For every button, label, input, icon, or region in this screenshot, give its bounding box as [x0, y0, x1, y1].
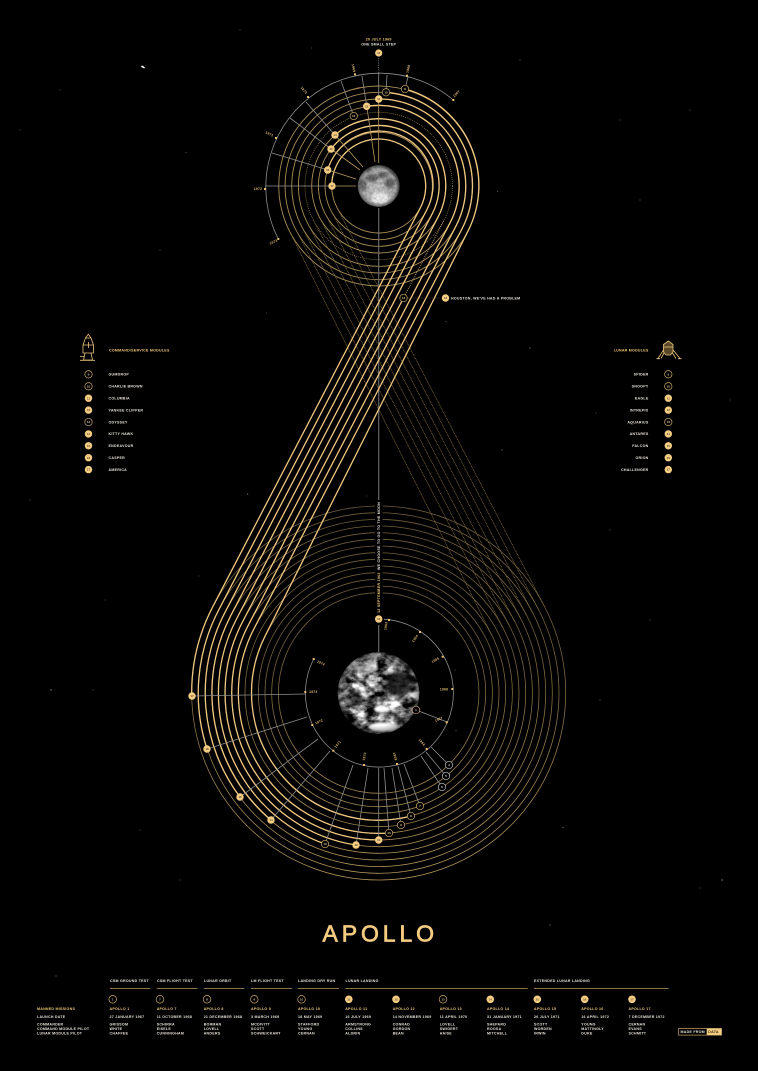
mission column: apollo 16: 16: [583, 997, 587, 1001]
mission column: apollo 14: 14: [489, 997, 492, 1001]
legend: lunar modules: ANTARES: [630, 432, 649, 436]
mission column: apollo 8: 21 DECEMBER 1968: [204, 1015, 242, 1019]
mission column: apollo 12: GORDON: [393, 1027, 411, 1031]
mission column: apollo 1: GRISSOM: [110, 1022, 128, 1026]
legend: lunar modules: FALCON: [632, 444, 649, 448]
mission column: apollo 15: 15: [536, 997, 539, 1001]
mission column: apollo 9: [250, 996, 281, 1036]
outbound bold trajectories earth to moon: [192, 89, 479, 845]
legend: command/service modules: ENDEAVOUR: [108, 444, 134, 448]
mission column: apollo 9: MCDIVITT: [251, 1022, 271, 1026]
legend: lunar modules: SPIDER: [634, 373, 649, 377]
legend: lunar modules: EAGLE: [635, 396, 649, 400]
vertical quote: 12 SEPTEMBER 1962: [377, 572, 381, 613]
earth mission timeline: 1965: [431, 656, 440, 664]
legend: command/service modules: 10: [87, 384, 90, 388]
legend: lunar modules: [614, 341, 682, 473]
earth mission markers: 4: [448, 763, 450, 767]
mission column: apollo 11: COLLINS: [345, 1027, 363, 1031]
moon mission markers: 10: [384, 90, 388, 94]
icon: lunar module: [656, 341, 682, 359]
earth mission markers: 11: [377, 838, 381, 842]
mission column: apollo 12: APOLLO 12: [393, 1007, 415, 1011]
legend: command/service modules: COLUMBIA: [108, 396, 130, 400]
legend: lunar modules: 10: [667, 384, 670, 388]
earth mission markers: 1: [415, 708, 417, 712]
mission column: apollo 13: HAISE: [440, 1032, 452, 1036]
moon mission markers: 11: [377, 51, 381, 55]
legend: lunar modules: 16: [667, 456, 670, 460]
legend: lunar modules: CHALLENGER: [621, 468, 649, 472]
mission column: apollo 17: APOLLO 17: [628, 1007, 651, 1011]
mission column: apollo 12: [392, 996, 431, 1036]
legend: command/service modules: 9: [88, 372, 90, 376]
callout: one small step: ONE SMALL STEP: [361, 42, 397, 46]
moon mission timeline: 1968: [405, 64, 411, 73]
earth mission markers: 5: [445, 774, 447, 778]
moon mission markers: 15: [329, 147, 333, 151]
mission column: apollo 10: APOLLO 10: [298, 1007, 320, 1011]
table row headings: LAUNCH DATE: [37, 1015, 66, 1019]
mission column: apollo 7: SCHIRRA: [157, 1022, 175, 1026]
earth orbit rings: [192, 506, 566, 880]
badge: made from data: MADE FROM: [680, 1030, 705, 1034]
mission column: apollo 16: 16 APRIL 1972: [581, 1015, 609, 1019]
legend: lunar modules: SNOOPY: [632, 385, 649, 389]
mission column: apollo 10: YOUNG: [298, 1027, 312, 1031]
legend: command/service modules: [80, 334, 170, 473]
earth mission markers: 12: [377, 617, 381, 621]
legend: lunar modules: LUNAR MODULES: [614, 348, 649, 352]
earth mission markers: 7: [419, 804, 421, 808]
badge: made from data: DATA: [708, 1030, 719, 1034]
moon: [357, 165, 401, 207]
mission column: apollo 1: WHITE: [110, 1027, 123, 1031]
table row headings: LUNAR MODULE PILOT: [37, 1032, 83, 1036]
earth mission markers: 8: [410, 814, 412, 818]
earth mission timeline: 1968: [418, 738, 426, 747]
mission table categories: CSM GROUND TEST: [110, 979, 149, 983]
earth mission markers: 17: [190, 694, 194, 698]
callout: one small step: [361, 38, 397, 46]
mission column: apollo 8: LOVELL: [204, 1027, 220, 1031]
earth mission timeline: [192, 619, 453, 845]
earth mission markers: 12: [354, 843, 358, 847]
moon mission timeline: 1971: [265, 131, 274, 138]
mission column: apollo 15: WORDEN: [534, 1027, 552, 1031]
moon mission timeline: 1972: [254, 187, 262, 191]
mission column: apollo 14: APOLLO 14: [487, 1007, 509, 1011]
moon mission markers: 17: [330, 184, 334, 188]
mission column: apollo 9: 3 MARCH 1969: [251, 1015, 279, 1019]
earth mission timeline: 1967: [434, 716, 444, 723]
legend: command/service modules: AMERICA: [108, 468, 127, 472]
mission column: apollo 8: APOLLO 8: [204, 1007, 224, 1011]
mission column: apollo 9: SCHWEICKART: [251, 1032, 281, 1036]
mission column: apollo 12: BEAN: [393, 1032, 404, 1036]
moon mission markers: 13: [352, 114, 356, 118]
mission column: apollo 8: ANDERS: [204, 1032, 221, 1036]
badge: made from data: [678, 1028, 722, 1035]
mission column: apollo 9: 9: [253, 997, 255, 1001]
legend: command/service modules: 11: [87, 396, 90, 400]
legend: command/service modules: 14: [87, 432, 90, 436]
mission column: apollo 1: CHAFFEE: [110, 1032, 129, 1036]
legend: command/service modules: CHARLIE BROWN: [108, 385, 143, 389]
callout: houston: 13: [402, 296, 405, 300]
legend: lunar modules: 17: [667, 468, 670, 472]
mission table categories: LANDING DRY RUN: [298, 979, 335, 983]
legend: command/service modules: 15: [87, 444, 90, 448]
return trajectories from moon to earth: [289, 208, 545, 636]
mission column: apollo 13: [439, 996, 467, 1036]
legend: lunar modules: 13: [667, 420, 670, 424]
apollo 13 dotted leg: [404, 220, 444, 298]
table row headings: COMMAND MODULE PILOT: [37, 1027, 90, 1031]
callout: houston: [400, 294, 520, 302]
mission column: apollo 9: SCOTT: [251, 1027, 265, 1031]
mission column: apollo 14: SHEPARD: [487, 1022, 506, 1026]
table row headings: MANNED MISSIONS: [37, 1007, 75, 1011]
mission column: apollo 10: 18 MAY 1969: [298, 1015, 322, 1019]
callout: houston: 13: [444, 296, 447, 300]
legend: command/service modules: YANKEE CLIPPER: [108, 408, 143, 412]
mission table categories: LUNAR ORBIT: [204, 979, 232, 983]
legend: command/service modules: KITTY HAWK: [108, 432, 133, 436]
mission column: apollo 1: [109, 996, 144, 1036]
mission column: apollo 13: SWIGERT: [440, 1027, 459, 1031]
earth mission markers: 14: [269, 818, 273, 822]
earth mission markers: 9: [400, 823, 402, 827]
mission column: apollo 16: YOUNG: [581, 1022, 596, 1026]
mission column: apollo 15: [534, 996, 560, 1036]
legend: command/service modules: 17: [87, 468, 90, 472]
mission column: apollo 17: 17: [630, 997, 634, 1001]
mission table categories: EXTENDED LUNAR LANDING: [534, 979, 590, 983]
callout: one small step: 20 JULY 1969: [366, 38, 392, 42]
earth mission markers: 15: [238, 795, 242, 799]
legend: command/service modules: GUMDROP: [108, 373, 129, 377]
mission column: apollo 10: CERNAN: [298, 1032, 315, 1036]
legend: lunar modules: AQUARIUS: [627, 420, 649, 424]
earth mission markers: 16: [205, 747, 209, 751]
mission column: apollo 13: APOLLO 13: [440, 1007, 462, 1011]
mission column: apollo 15: 26 JULY 1971: [534, 1015, 560, 1019]
mission column: apollo 8: BORMAN: [204, 1022, 222, 1026]
moon mission markers: 8: [404, 87, 406, 91]
mission column: apollo 14: MITCHELL: [487, 1032, 508, 1036]
mission column: apollo 11: 11: [347, 997, 351, 1001]
mission column: apollo 7: 11 OCTOBER 1968: [157, 1015, 192, 1019]
earth mission timeline: 1970: [362, 752, 367, 761]
callout: houston: HOUSTON, WE'VE HAD A PROBLEM: [451, 296, 520, 300]
mission table categories: CSM FLIGHT TEST: [157, 979, 193, 983]
mission column: apollo 1: 1: [112, 997, 114, 1001]
earth mission markers: [188, 615, 453, 849]
moon orbit rings: [279, 86, 479, 286]
earth mission markers: 6: [441, 785, 443, 789]
mission column: apollo 10: 10: [300, 997, 303, 1001]
icon: command service module: [80, 334, 95, 360]
moon mission markers: 14: [333, 133, 337, 137]
earth mission timeline: 1974: [316, 660, 326, 667]
mission column: apollo 15: APOLLO 15: [534, 1007, 556, 1011]
mission column: apollo 13: 13: [441, 997, 445, 1001]
mission column: apollo 7: [156, 996, 192, 1036]
mission column: apollo 8: [203, 996, 242, 1036]
mission column: apollo 11: ALDRIN: [345, 1032, 361, 1036]
mission column: apollo 10: STAFFORD: [298, 1022, 319, 1026]
moon mission markers: 12: [365, 104, 369, 108]
earth mission timeline: 1963: [383, 621, 389, 630]
mission column: apollo 11: 16 JULY 1969: [345, 1015, 371, 1019]
mission column: apollo 8: 8: [206, 997, 208, 1001]
moon mission markers: 16: [326, 168, 330, 172]
mission column: apollo 14: [486, 996, 522, 1036]
mission column: apollo 17: [628, 996, 665, 1036]
earth mission timeline: 1972: [314, 718, 324, 725]
mission table categories: [110, 979, 669, 988]
mission column: apollo 16: MATTINGLY: [581, 1027, 604, 1031]
table row headings: [37, 1007, 90, 1036]
mission column: apollo 14: 31 JANUARY 1971: [487, 1015, 522, 1019]
mission column: apollo 11: APOLLO 11: [345, 1007, 367, 1011]
mission column: apollo 7: APOLLO 7: [157, 1007, 177, 1011]
vertical quote: WE CHOOSE TO GO TO THE MOON: [377, 502, 381, 570]
mission table categories: LM FLIGHT TEST: [251, 979, 284, 983]
earth mission timeline: 1969: [392, 752, 398, 761]
moon mission timeline: 1973: [269, 239, 278, 246]
legend: command/service modules: 16: [87, 456, 90, 460]
gap behind quote: [375, 500, 383, 616]
moon mission timeline: [254, 58, 461, 246]
moon mission timeline: 1969: [351, 64, 356, 73]
earth mission timeline: 1971: [334, 740, 342, 749]
mission column: apollo 7: CUNNINGHAM: [157, 1032, 184, 1036]
mission column: apollo 15: IRWIN: [534, 1032, 546, 1036]
legend: lunar modules: 15: [667, 444, 670, 448]
mission column: apollo 14: ROOSA: [487, 1027, 502, 1031]
mission column: apollo 16: APOLLO 16: [581, 1007, 604, 1011]
mission column: apollo 10: [298, 996, 322, 1036]
moon mission timeline: 1970: [300, 86, 308, 95]
legend: command/service modules: 13: [87, 420, 90, 424]
earth mission markers: 13: [323, 842, 327, 846]
moon mission markers: [324, 49, 409, 190]
legend: lunar modules: 12: [667, 408, 670, 412]
legend: command/service modules: CASPER: [108, 456, 125, 460]
mission column: apollo 17: EVANS: [628, 1027, 642, 1031]
earth mission timeline: 1966: [440, 688, 448, 692]
earth: [337, 652, 421, 734]
mission table categories: LUNAR LANDING: [346, 979, 379, 983]
mission column: apollo 13: 11 APRIL 1970: [440, 1015, 467, 1019]
mission column: apollo 1: APOLLO 1: [110, 1007, 129, 1011]
mission column: apollo 16: DUKE: [581, 1032, 593, 1036]
legend: lunar modules: ORION: [635, 456, 649, 460]
vertical quote: [377, 502, 381, 613]
legend: lunar modules: 9: [667, 372, 669, 376]
earth mission timeline: 1964: [411, 634, 419, 643]
mission column: apollo 17: CERNAN: [628, 1022, 646, 1026]
legend: command/service modules: ODYSSEY: [108, 420, 128, 424]
mission column: apollo 13: LOVELL: [440, 1022, 456, 1026]
mission column: apollo 7: 7: [159, 997, 161, 1001]
mission column: apollo 12: 14 NOVEMBER 1969: [393, 1015, 431, 1019]
mission column: apollo 11: [345, 996, 371, 1036]
earth mission markers: 10: [387, 831, 391, 835]
legend: lunar modules: 14: [667, 432, 670, 436]
mission column: apollo 11: ARMSTRONG: [345, 1022, 371, 1026]
mission column: apollo 9: APOLLO 9: [251, 1007, 271, 1011]
moon mission timeline: 1967: [452, 89, 461, 98]
mission column: apollo 17: 7 DECEMBER 1972: [628, 1015, 665, 1019]
title: APOLLO: [322, 921, 438, 947]
mission column: apollo 7: EISELE: [157, 1027, 171, 1031]
earth mission timeline: 1973: [309, 690, 317, 694]
legend: lunar modules: 11: [667, 396, 670, 400]
moon mission markers: 11: [377, 97, 381, 101]
mission column: apollo 1: 27 JANUARY 1967: [110, 1015, 144, 1019]
legend: command/service modules: COMMAND/SERVICE MODULES: [109, 348, 170, 352]
mission column: apollo 12: CONRAD: [393, 1022, 410, 1026]
mission column: apollo 16: [581, 996, 609, 1036]
legend: lunar modules: INTREPID: [630, 408, 649, 412]
mission column: apollo 17: SCHMITT: [628, 1032, 647, 1036]
central axis line: [378, 208, 380, 652]
mission column: apollo 12: 12: [394, 997, 398, 1001]
table row headings: COMMANDER: [37, 1022, 64, 1026]
mission column: apollo 15: SCOTT: [534, 1022, 548, 1026]
legend: command/service modules: 12: [87, 408, 90, 412]
